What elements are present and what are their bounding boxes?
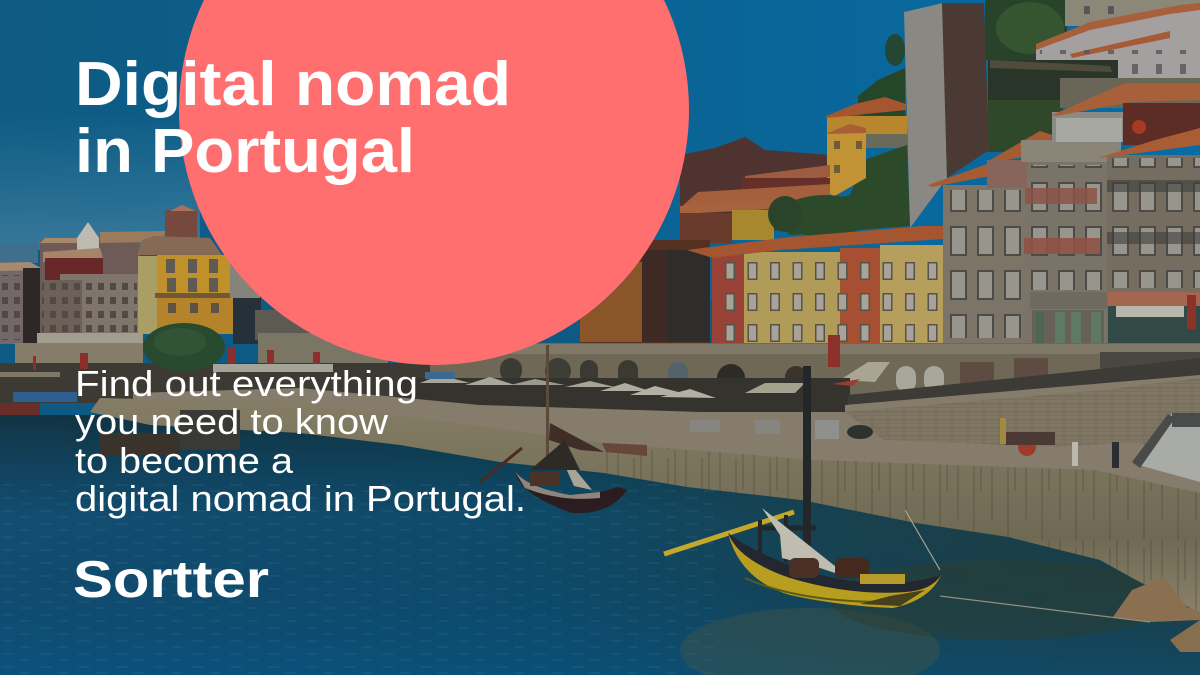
river water [0,415,1200,675]
logo: Sortter: Sortter [73,551,269,609]
title: in Portugal [75,117,415,186]
subtitle text block: Find out everything [75,363,418,404]
left water edge and pier [100,410,240,455]
subtitle text block: to become a [75,440,294,481]
yellow hillside buildings [680,97,910,243]
subtitle text block: digital nomad in Portugal. [75,478,526,519]
arcade and terrace [430,335,1200,413]
horizon haze [0,110,200,250]
crowded left promenade [0,333,520,421]
awnings and cafe crowd [400,358,1200,412]
title: Digital nomad [75,50,511,119]
rabelo boat, yellow [664,366,1150,622]
sky [0,0,1200,300]
tower under scaffolding [904,3,989,228]
subtitle text block [75,363,526,519]
subtitle text block: you need to know [75,401,389,442]
colourful facade row [687,226,944,345]
rabelo boat, dark [480,345,647,513]
coral circle [179,0,689,365]
left waterfront buildings [0,205,315,367]
quay surface and stone river wall [90,375,1200,652]
title [75,50,511,186]
tree on the promenade [143,323,225,371]
middle dark buildings behind the circle [580,240,710,345]
green hillside and upper right buildings [858,0,1200,152]
grey azulejo tenements [928,83,1200,348]
